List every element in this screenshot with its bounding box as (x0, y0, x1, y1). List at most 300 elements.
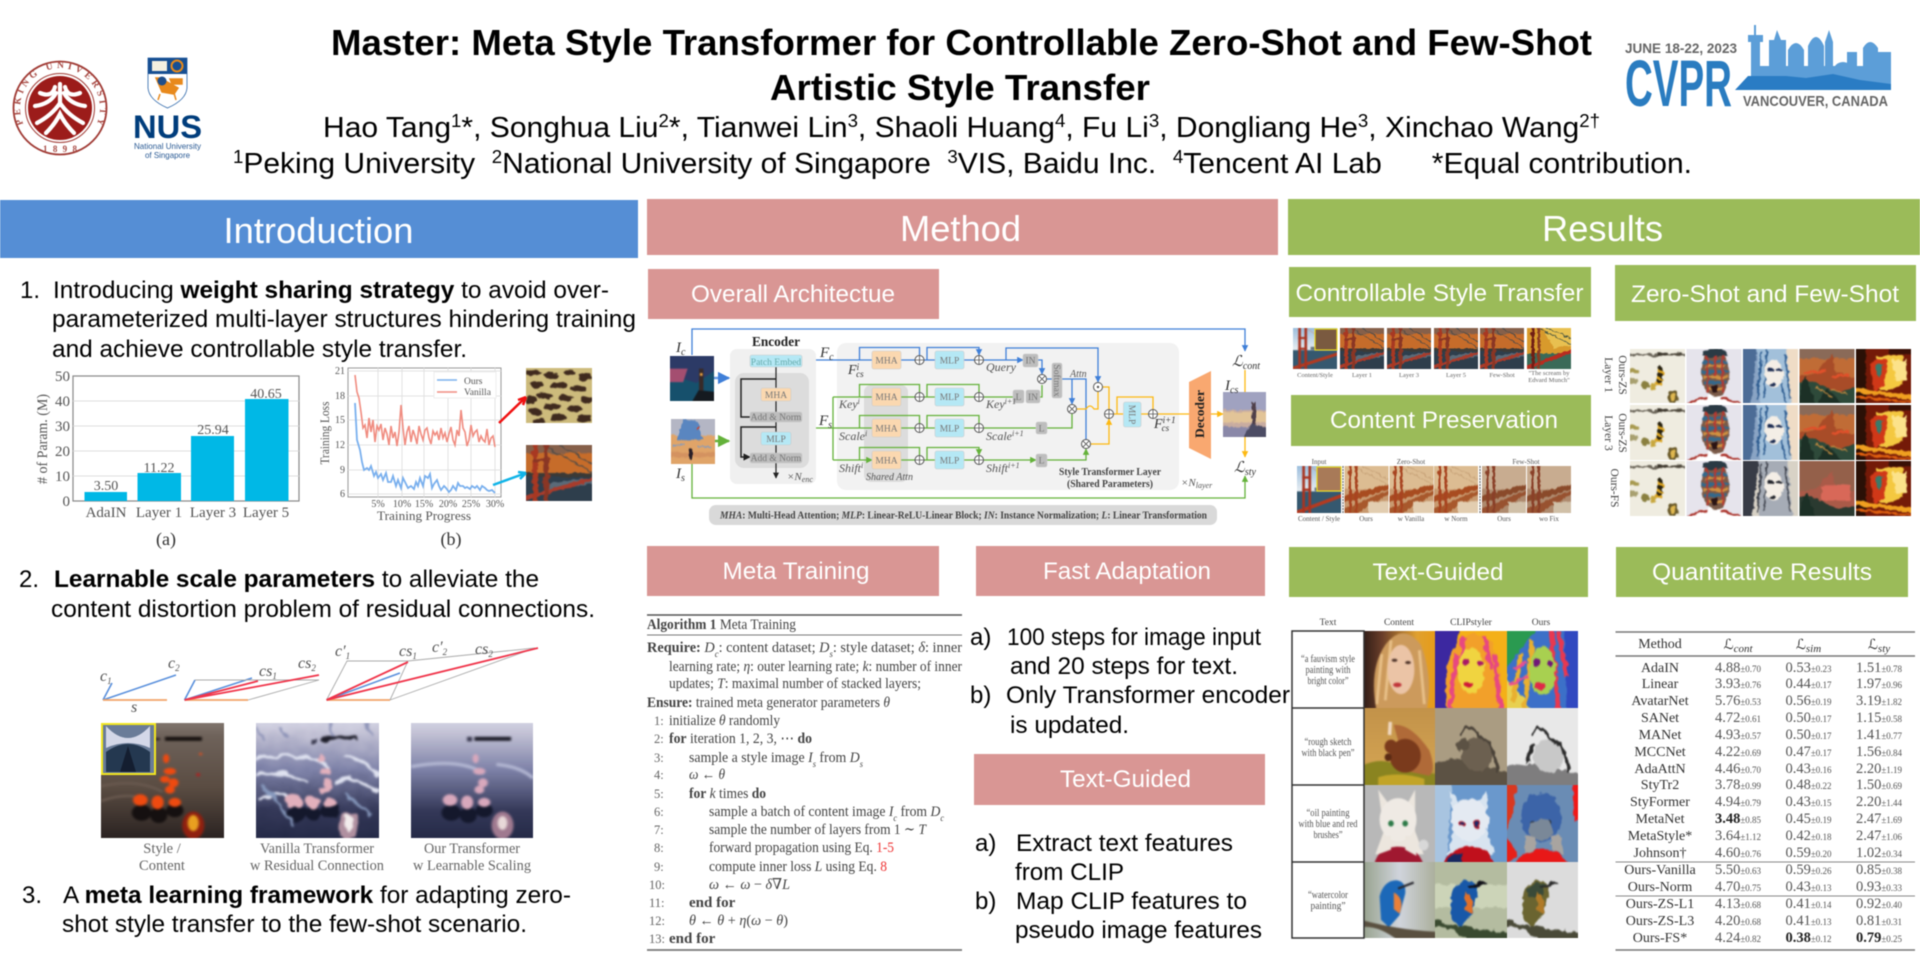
sub-heading: Overall Architecture (648, 269, 939, 319)
results table: Ours-FS* (1633, 931, 1687, 946)
vector diagram: residual and scaling: 2 (488, 649, 493, 659)
text block: point 1 (20, 277, 636, 363)
panel header: Introduction: Introduction (224, 210, 414, 251)
text block: point 1: Introducing weight sharing strategy to avoid over- (53, 277, 609, 304)
text block: point 2: 2. (19, 566, 39, 593)
bar chart: number of parameters: 10 (55, 469, 70, 485)
image table: text-guided results: painting with (1306, 665, 1350, 676)
image strip: controllable style transfer (1289, 324, 1575, 384)
bar chart: number of parameters: 50 (55, 369, 70, 385)
algorithm box: 3: (654, 751, 664, 765)
algorithm box: 2: (654, 732, 664, 746)
results table: cont (1734, 643, 1753, 655)
architecture diagram: sty (1245, 467, 1256, 478)
image strip: controllable style transfer: Few-Shot (1489, 372, 1515, 379)
vector diagram: residual and scaling: cs (259, 663, 272, 680)
diagram text: MLP (766, 435, 786, 445)
image grid: zero-shot and few-shot: Ours-ZS (1616, 355, 1628, 395)
vector diagram: residual and scaling: 1 (346, 651, 350, 661)
text block: text-guided method: Extract text features (1016, 830, 1233, 857)
diagram text: MLP (940, 393, 959, 403)
image strip: controllable style transfer: "The scream by (1529, 370, 1570, 377)
algorithm box: 10: (649, 878, 665, 892)
algorithm box: sample a batch of content image Ic from Dc (709, 804, 944, 823)
results table (1616, 632, 1915, 950)
text block: point 2: content distortion problem of residual connections. (51, 596, 595, 623)
results table: 4.93±0.57 (1715, 727, 1762, 743)
sub-heading: Fast Adaptation (976, 546, 1265, 596)
architecture diagram: cs (1230, 385, 1238, 396)
results table: Ours-Norm (1628, 880, 1692, 895)
image table: text-guided results: painting” (1310, 901, 1346, 912)
captions: Our Transformer (424, 841, 520, 857)
vector diagram: residual and scaling: 2 (443, 647, 448, 657)
image strip: controllable style transfer: Edvard Munch" (1528, 377, 1570, 384)
image: our transformer (399, 712, 545, 850)
results table: 5.50±0.63 (1715, 862, 1762, 878)
results table: 4.60±0.76 (1715, 845, 1762, 861)
results table: 0.93±0.33 (1856, 879, 1903, 895)
architecture diagram: Shared Attn (866, 472, 913, 483)
results table: 0.38±0.12 (1785, 930, 1832, 946)
sub-heading: Text-Guided (method) (974, 754, 1265, 805)
text block: point 1: parameterized multi-layer structures hindering training (52, 306, 636, 333)
sub-heading: Overall Architecture: Overall Architectue (691, 281, 895, 308)
text block: text-guided method: pseudo image features (1015, 917, 1262, 944)
results table: 2.20±1.44 (1856, 794, 1903, 810)
captions: w Residual Connection (250, 858, 385, 874)
results table: 0.45±0.19 (1785, 811, 1832, 827)
image strip: content preservation: Few-Shot (1512, 458, 1540, 466)
authors: 2 (659, 111, 669, 131)
green flows (692, 384, 1245, 498)
architecture diagram: s (681, 473, 685, 484)
algorithm box: ω ← θ (689, 767, 726, 783)
algorithm box: Require: Dc: content dataset; Ds: style dataset; δ: inner (647, 640, 962, 659)
vector diagram: residual and scaling: s (131, 699, 137, 716)
results table: 3.64±1.12 (1715, 828, 1761, 844)
diagram text: MHA (765, 391, 787, 401)
text block: text-guided method: from CLIP (1015, 859, 1124, 886)
results table: 3.93±0.76 (1715, 676, 1762, 692)
algorithm box: sample the number of layers from 1 ∼ T (709, 822, 927, 838)
vector diagram: residual and scaling (100, 639, 538, 716)
authors: , Xinchao Wang (1368, 112, 1579, 144)
results table: 4.22±0.69 (1715, 744, 1762, 760)
architecture diagram: i+1 (1163, 415, 1176, 425)
architecture diagram: ×N (787, 471, 802, 483)
image table: text-guided results: “watercolor (1308, 890, 1349, 901)
architecture diagram: Style Transformer Layer (1059, 467, 1161, 478)
text block: point 3 (22, 882, 571, 938)
text block: fast adaptation: Only Transformer encoder (1006, 682, 1290, 709)
architecture diagram: enc (802, 475, 813, 484)
image: vanilla transformer (244, 712, 391, 850)
line chart: training loss: Vanilla (464, 388, 492, 398)
image strip: content preservation: w Norm (1444, 515, 1468, 523)
architecture diagram: Decoder (1192, 390, 1207, 438)
bar chart: number of parameters: Layer 1 (136, 505, 182, 521)
results table: 4.24±0.82 (1715, 930, 1761, 946)
image table: text-guided results: with blue and red (1298, 819, 1358, 830)
captions: w Learnable Scaling (413, 858, 531, 874)
results table: AdaAttN (1634, 762, 1686, 777)
line chart: training loss: 18 (335, 391, 345, 402)
text block: point 3: 3. (22, 882, 42, 909)
blue flows (692, 329, 1245, 440)
arrow: red to texture (499, 397, 526, 423)
text block: fast adaptation: a) (970, 624, 991, 651)
panel header: Method (647, 199, 1278, 255)
architecture diagram: Shift (839, 461, 861, 475)
architecture diagram: i (858, 397, 860, 406)
results table: 0.79±0.25 (1856, 930, 1903, 946)
sub-heading: Content Preservation: Content Preservation (1330, 407, 1558, 434)
results table: 0.43±0.16 (1785, 761, 1832, 777)
icon: CVPR 2023 logo: VANCOUVER, CANADA (1743, 93, 1888, 110)
image table: text-guided results: with black pen” (1302, 748, 1354, 759)
architecture diagram: Key (839, 397, 858, 411)
results table: StyTr2 (1641, 778, 1679, 793)
results table: 1.02±0.34 (1856, 845, 1903, 861)
results table: 3.19±1.82 (1856, 693, 1902, 709)
results table: 0.48±0.22 (1785, 777, 1832, 793)
algorithm box: 1: (654, 714, 664, 728)
image grid: zero-shot and few-shot: Layer 3 (1602, 415, 1614, 451)
algorithm box: end for (689, 895, 736, 911)
authors: , Fu Li (1065, 112, 1149, 144)
authors: , Dongliang He (1159, 112, 1358, 144)
text block: point 2 (19, 566, 595, 623)
architecture diagram: i+1 (1008, 461, 1020, 470)
image table: text-guided results: “a fauvism style (1301, 654, 1355, 665)
vector diagram: residual and scaling: c′ (335, 643, 346, 660)
image table: text-guided results: bright color” (1308, 676, 1348, 687)
algorithm box: Ensure: trained meta generator parameters θ (647, 695, 891, 711)
line chart: training loss: Training Progress (377, 508, 471, 523)
vector diagram: residual and scaling: cs (475, 641, 488, 658)
line chart: training loss: 6 (340, 489, 345, 500)
diagram text: MLP (940, 456, 959, 466)
results table: 4.46±0.70 (1715, 761, 1762, 777)
algorithm box: ω ← ω − δ∇L (709, 877, 790, 893)
bar chart: number of parameters: 25.94 (197, 423, 229, 438)
arrow: blue to bridge (493, 472, 526, 485)
encoder lines (741, 367, 776, 478)
image: bridge output (519, 439, 599, 507)
results table: 0.41±0.14 (1785, 896, 1832, 912)
sub-heading: Text-Guided (results): Text-Guided (1372, 559, 1504, 586)
captions: Style / (143, 841, 182, 857)
diagram images (666, 352, 718, 406)
line chart: training loss: 21 (335, 366, 345, 377)
title: Master: Meta Style Transformer for Controllable Zero-Shot and Few-Shot (331, 22, 1592, 63)
title: Artistic Style Transfer (770, 67, 1150, 108)
diagram text: Softmax (1051, 364, 1062, 397)
line chart: training loss: 15 (335, 415, 345, 426)
results table: 0.81±0.31 (1856, 913, 1902, 929)
text block: text-guided method: Map CLIP features to (1016, 888, 1247, 915)
bar chart: number of parameters: AdaIN (86, 505, 127, 521)
icon: NUS logo (133, 58, 202, 160)
affiliations: 4 (1173, 147, 1183, 167)
diagram text: MHA (875, 356, 898, 366)
results table: ℒ (1723, 638, 1734, 653)
vector diagram: residual and scaling: cs (399, 643, 412, 660)
algorithm box: forward propagation using Eq. 1-5 (709, 840, 894, 856)
results table: Ours-ZS-L1 (1626, 897, 1694, 912)
panel header: Results: Results (1542, 208, 1663, 249)
algorithm box (647, 615, 962, 950)
architecture diagram: cs (1162, 423, 1170, 433)
image strip: content preservation: Ours (1359, 515, 1373, 523)
captions: Vanilla Transformer (260, 841, 374, 857)
bar chart: number of parameters: 3.50 (94, 479, 118, 494)
authors: Hao Tang (323, 112, 447, 144)
architecture diagram: I (1225, 378, 1230, 394)
algorithm box: learning rate; η: outer learning rate; k: number of inner (669, 659, 962, 675)
algorithm box: 6: (654, 805, 664, 819)
results table: Ours-Vanilla (1624, 863, 1697, 878)
text block: point 2: Learnable scale parameters to alleviate the (54, 566, 539, 593)
line chart: training loss: Ours (464, 377, 483, 387)
panel header: Method: Method (900, 208, 1021, 249)
sub-heading: Meta Training: Meta Training (722, 558, 870, 585)
layer blocks (872, 351, 1141, 469)
authors: 3 (848, 111, 858, 131)
results table: 4.88±0.70 (1715, 660, 1762, 676)
bar chart: number of parameters (35, 369, 299, 550)
results table: MCCNet (1634, 745, 1686, 760)
vector diagram: residual and scaling: 1 (107, 676, 112, 686)
panel header: Introduction (0, 200, 638, 258)
vector diagram: residual and scaling: c (168, 655, 175, 672)
affiliations: National University of Singapore (502, 148, 947, 180)
architecture diagram: Scale (986, 429, 1012, 443)
results table: SANet (1641, 711, 1679, 726)
results table: 1.97±0.96 (1856, 676, 1903, 692)
icon: CVPR 2023 logo (1625, 25, 1891, 120)
line chart: training loss: 9 (340, 465, 345, 476)
algorithm box: 11: (649, 896, 665, 910)
algorithm box: 9: (654, 860, 664, 874)
sub-heading: Zero-Shot and Few-Shot: Zero-Shot and Few-Shot (1631, 281, 1899, 308)
icon: NUS logo: National University (134, 141, 202, 151)
architecture diagram: i (857, 362, 860, 372)
image table: text-guided results: CLIPstyler (1450, 618, 1493, 628)
results table: sty (1878, 643, 1890, 655)
results table: 1.15±0.58 (1856, 710, 1903, 726)
diagram legend bar: MHA: Multi-Head Attention; MLP: Linear-ReLU-Linear Block; IN: Instance Normalization; L: Linear Transformation (719, 510, 1207, 522)
architecture diagram: i (861, 461, 863, 470)
icon: Peking University logo: PEKING UNIVERSITY (14, 62, 106, 126)
vector diagram: residual and scaling: c′ (432, 639, 443, 656)
image table: text-guided results: Ours (1532, 618, 1551, 628)
authors: 3 (1358, 111, 1368, 131)
image: style / content (89, 712, 236, 850)
image table: text-guided results: “rough sketch (1304, 737, 1352, 748)
results table: 3.78±0.99 (1715, 777, 1762, 793)
diagram text: MLP (940, 356, 959, 366)
diagram text: L (1016, 393, 1022, 403)
icon: Peking University logo: 1898 (43, 144, 78, 154)
results table: 1.50±0.69 (1856, 777, 1903, 793)
results table: 0.59±0.20 (1785, 845, 1832, 861)
text block: point 1: and achieve controllable style transfer. (52, 336, 467, 363)
diagram text: IN (1028, 393, 1038, 403)
authors: , Shaoli Huang (858, 112, 1055, 144)
architecture diagram: F (848, 363, 857, 378)
architecture diagram: cs (856, 369, 864, 379)
architecture diagram: i+1 (1012, 429, 1024, 438)
algorithm box: end for (669, 931, 716, 947)
algorithm box: for iteration 1, 2, 3, ⋯ do (669, 731, 812, 747)
architecture diagram: c (681, 347, 686, 358)
results table: 0.50±0.17 (1785, 727, 1832, 743)
architecture diagram: ℒ (1234, 460, 1245, 476)
results table: MANet (1639, 728, 1681, 743)
affiliations: 2 (492, 147, 502, 167)
bar chart: number of parameters: # of Param. (M) (35, 394, 51, 484)
bar chart: number of parameters: 11.22 (144, 461, 174, 476)
line chart: training loss: 25% (462, 499, 480, 510)
image strip: content preservation: Input (1312, 458, 1326, 466)
results table: sim (1806, 643, 1821, 655)
authors: 1 (451, 111, 461, 131)
algorithm box: Algorithm 1 Meta Training (647, 617, 796, 633)
image strip: content preservation: w Vanilla (1398, 515, 1425, 523)
line chart: training loss: 30% (486, 499, 504, 510)
image grid: zero-shot and few-shot: Layer 1 (1602, 357, 1614, 393)
results table: Linear (1642, 677, 1679, 692)
architecture diagram: Scale (839, 429, 865, 443)
results table: Ours-ZS-L3 (1626, 914, 1694, 929)
line chart: training loss: 12 (335, 440, 345, 451)
architecture diagram: s (828, 420, 832, 431)
line chart: training loss: 20% (439, 499, 457, 510)
vector diagram: residual and scaling: c (100, 668, 107, 685)
results table: ℒ (1796, 638, 1806, 653)
results table: Johnson† (1634, 846, 1686, 861)
image strip: content preservation: wo Fix (1539, 515, 1559, 523)
bar chart: number of parameters: 30 (55, 419, 70, 435)
sub-heading: Controllable Style Transfer (1289, 267, 1591, 317)
results table: 4.72±0.61 (1715, 710, 1761, 726)
architecture diagram: cont (1243, 361, 1260, 372)
results table: 4.20±0.68 (1715, 913, 1762, 929)
sub-heading: Text-Guided (results) (1289, 547, 1588, 597)
architecture diagram: i+1 (1005, 397, 1016, 406)
sub-heading: Quantitative Results: Quantitative Results (1652, 559, 1872, 586)
icon: NUS logo: NUS (133, 109, 202, 145)
diagram text: IN (1025, 356, 1036, 366)
text block: text-guided method: a) (975, 830, 996, 857)
image grid: zero-shot and few-shot (1602, 344, 1916, 522)
image strip: controllable style transfer: Content/Style (1297, 372, 1333, 379)
architecture diagram: i (865, 429, 867, 438)
image strip: content preservation (1293, 458, 1575, 523)
architecture diagram: (Shared Parameters) (1067, 479, 1153, 490)
results table: 0.85±0.38 (1856, 862, 1903, 878)
results table: 0.41±0.13 (1785, 913, 1832, 929)
bar chart: number of parameters: 40.65 (250, 387, 282, 402)
architecture diagram: I (676, 340, 681, 356)
icon: Peking University logo (12, 60, 108, 156)
line chart: training loss: 5% (371, 499, 385, 510)
captions: Content (139, 858, 185, 874)
architecture diagram: c (829, 352, 834, 363)
architecture diagram: F (820, 345, 829, 361)
text block: fast adaptation (970, 624, 1290, 739)
text block: fast adaptation: and 20 steps for text. (1010, 653, 1238, 680)
authors: 2† (1579, 111, 1600, 131)
affiliations: 3 (947, 147, 958, 167)
affiliations: Tencent AI Lab *Equal contribution. (1183, 148, 1692, 180)
results table: 0.43±0.13 (1785, 879, 1832, 895)
results table: AvatarNet (1631, 694, 1689, 709)
algorithm box: 4: (654, 768, 664, 782)
image table: text-guided results (1292, 618, 1585, 946)
diagram text (751, 356, 1136, 466)
line chart: training loss: 10% (393, 499, 411, 510)
encoder boxes (750, 355, 802, 463)
decoder (1189, 371, 1211, 459)
results table: MetaStyle* (1628, 829, 1692, 844)
image strip: controllable style transfer: Layer 5 (1446, 372, 1466, 379)
sub-heading: Content Preservation (1291, 395, 1591, 446)
text block: point 3: A meta learning framework for adapting zero- (63, 882, 571, 909)
vector diagram: residual and scaling: cs (298, 655, 311, 672)
diagram text: MHA (875, 456, 898, 466)
diagram text: L (1039, 424, 1045, 434)
results table: 0.43±0.15 (1785, 794, 1832, 810)
image strip: content preservation: Zero-Shot (1397, 458, 1425, 466)
architecture diagram: Shift (986, 461, 1008, 475)
line chart: training loss: Training Loss (317, 402, 332, 464)
affiliations: 1 (233, 147, 243, 167)
results table: 0.42±0.18 (1785, 828, 1832, 844)
vector diagram: residual and scaling: 2 (175, 663, 180, 673)
diagram text: Patch Embed (751, 358, 801, 368)
title (331, 22, 1592, 108)
sub-heading: Quantitative Results (1616, 547, 1908, 597)
line chart: training loss (317, 366, 504, 550)
results table: ℒ (1868, 638, 1878, 653)
architecture diagram: F (819, 413, 828, 429)
results table: 4.70±0.75 (1715, 879, 1762, 895)
results table: 3.48±0.85 (1715, 811, 1762, 827)
image strip: controllable style transfer: Layer 1 (1352, 372, 1372, 379)
sub-heading: Controllable Style Transfer: Controllable Style Transfer (1296, 280, 1584, 307)
bar chart: number of parameters: Layer 3 (190, 505, 236, 521)
text block: fast adaptation: is updated. (1010, 712, 1129, 739)
bar chart: number of parameters: Layer 5 (243, 505, 289, 521)
image table: text-guided results: Text (1320, 618, 1337, 628)
results table: 0.44±0.17 (1785, 676, 1832, 692)
bar chart: number of parameters: 20 (55, 444, 70, 460)
results table: 0.92±0.40 (1856, 896, 1903, 912)
diagram text: L (1039, 456, 1045, 466)
image: texture output (519, 362, 599, 428)
operators (915, 356, 924, 364)
results table: 4.13±0.68 (1715, 896, 1762, 912)
line chart: training loss: (b) (440, 529, 462, 550)
architecture diagram: ×N (1181, 477, 1196, 489)
results table: 1.56±0.84 (1856, 744, 1903, 760)
diagram text: MHA (875, 393, 898, 403)
results table: StyFormer (1630, 795, 1690, 810)
architecture diagram: F (1154, 417, 1163, 432)
